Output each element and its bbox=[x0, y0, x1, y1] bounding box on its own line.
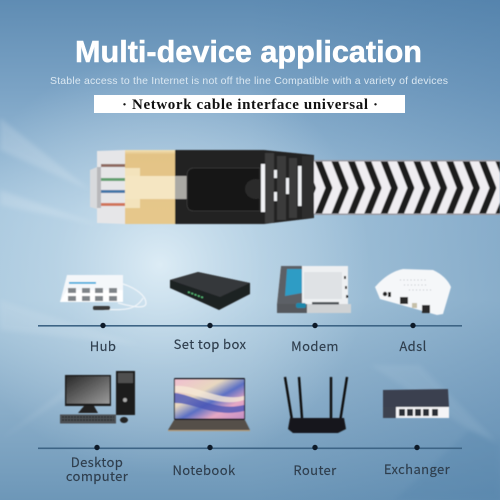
label: desktop computer: computer bbox=[66, 466, 129, 485]
device: exchanger bbox=[383, 389, 449, 418]
device: router bbox=[285, 377, 347, 433]
subtitle: Stable access to the Internet is not off the line Compatible with a variety of devices bbox=[50, 75, 448, 87]
row 1 timeline bbox=[38, 323, 462, 328]
label: notebook: Notebook bbox=[172, 460, 236, 479]
device: desktop computer bbox=[60, 371, 135, 424]
label: set top box: Set top box bbox=[174, 334, 246, 353]
cable plug illustration bbox=[90, 150, 500, 224]
title: Multi-device application bbox=[75, 34, 422, 69]
label: router: Router bbox=[293, 460, 337, 479]
transparent connector head bbox=[90, 150, 125, 224]
row 2 timeline bbox=[38, 445, 462, 450]
gold shield bbox=[125, 150, 187, 224]
label: exchanger: Exchanger bbox=[384, 459, 451, 478]
label: desktop computer bbox=[66, 452, 129, 485]
label: modem: Modem bbox=[291, 336, 339, 355]
label: desktop computer: Desktop bbox=[71, 452, 123, 471]
device: hub bbox=[60, 275, 146, 310]
device: adsl router bbox=[375, 269, 451, 315]
braided cable bbox=[314, 160, 500, 215]
banner: network cable interface universal: · Network cable interface universal · bbox=[122, 97, 378, 113]
black strain relief bbox=[175, 150, 314, 224]
label: adsl: Adsl bbox=[399, 336, 427, 355]
device: modem bbox=[277, 266, 351, 313]
label: hub: Hub bbox=[90, 336, 116, 355]
device: notebook bbox=[168, 378, 250, 431]
device: set top box bbox=[170, 272, 250, 310]
